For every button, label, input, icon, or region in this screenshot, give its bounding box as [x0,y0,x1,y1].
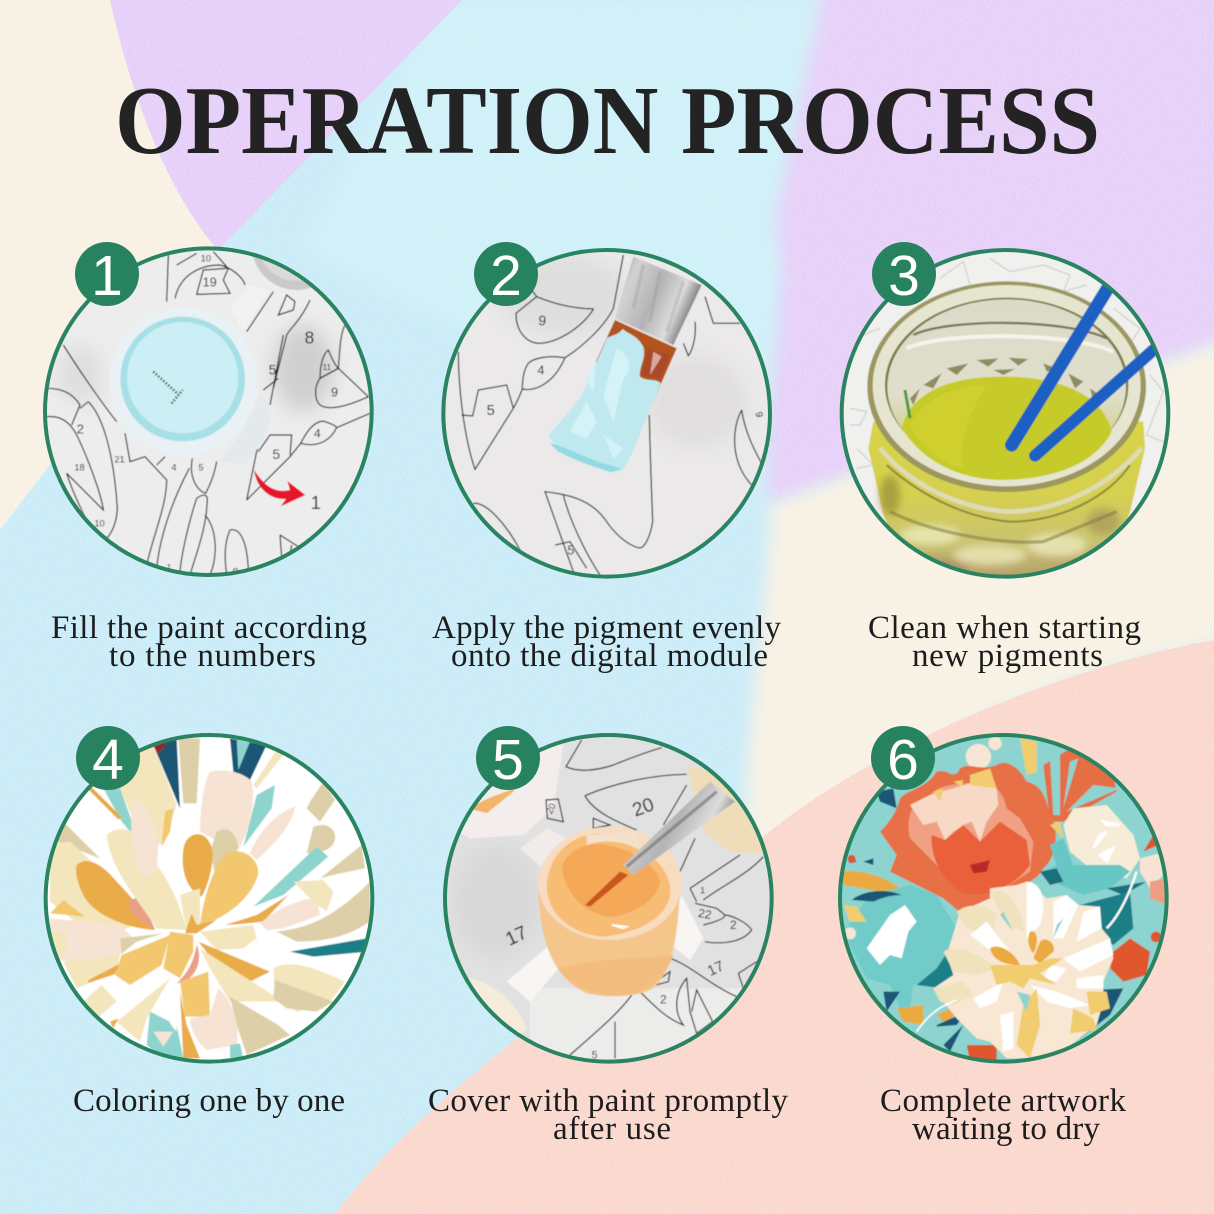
photo: paint cup on numbered canvas [43,246,374,577]
red-orange flower [880,763,1056,915]
caption: step 3: new pigments [912,638,1103,674]
photo: paint cup on numbered canvas: 4 [171,463,177,473]
caption: step 5: after use [553,1111,671,1147]
badge: number 2: 2 [490,244,522,308]
photo: paint cup on numbered canvas: 5 [269,361,277,377]
badge: number 6 [871,726,935,792]
photo: orange paint cup with brush: 22 [697,906,713,922]
caption: step 6 [880,1083,1126,1147]
caption: step 2: Apply the pigment evenly [432,610,782,646]
photo: paint cup on numbered canvas: 18 [74,463,85,473]
title: OPERATION PROCESS [115,67,1100,174]
panel: step 6 [830,725,1180,1147]
caption: step 3 [868,610,1141,674]
photo: orange paint cup with brush: 20 [544,802,558,815]
photo: orange paint cup with brush: 20 [630,794,657,822]
photo: brush applying blue paint [441,248,772,579]
caption: step 3: Clean when starting [868,610,1141,646]
caption: step 2 [432,610,782,674]
photo: paint cup on numbered canvas: 19 [203,276,217,290]
photo: brush applying blue paint: 4 [537,363,544,377]
badge: number 6: 6 [887,728,919,792]
photo: orange paint cup with brush: 2 [730,918,737,932]
panel: step 3 [830,235,1180,674]
caption: step 5: Cover with paint promptly [428,1083,788,1119]
photo: paint cup on numbered canvas: 4 [314,426,321,440]
photo: paint cup on numbered canvas: 11 [322,362,332,372]
badge: number 1 [75,242,139,308]
photo: brush applying blue paint: 9 [538,312,547,329]
photo: jar of cleaning water with brushes [840,248,1170,579]
photo: brush applying blue paint: 9 [753,411,764,419]
photo: paint cup on numbered canvas: 10 [201,254,211,264]
caption: step 2: onto the digital module [451,638,768,674]
pale top-right flower [1063,805,1140,878]
photo: paint cup on numbered canvas: 2 [77,421,84,436]
caption: step 1: Fill the paint according [51,610,367,646]
caption: step 5 [428,1083,788,1147]
photo: paint cup on numbered canvas: 5 [272,446,280,462]
badge: number 4: 4 [92,728,124,792]
panel: step 4 [30,725,390,1119]
icon: red arrow [254,470,305,506]
badge: number 5: 5 [492,728,524,792]
photo: paint cup on numbered canvas: 8 [305,327,314,347]
right dark and orange [1080,892,1133,945]
photo: orange paint cup with brush: 5 [592,1049,598,1061]
badge: number 4 [76,726,140,792]
white chrysanthemum [933,882,1113,1058]
photo: paint cup on numbered canvas: 9 [233,567,239,579]
photo: paint cup on numbered canvas: 1 [311,492,321,513]
caption: step 6: Complete artwork [880,1083,1126,1119]
photo: orange paint cup with brush: 17 [705,958,727,980]
photo: paint cup on numbered canvas: 9 [331,386,338,400]
badge: number 2 [474,242,538,308]
photo: brush applying blue paint: 5 [487,403,495,419]
badge: number 3 [872,242,936,308]
caption: step 1 [51,610,367,674]
photo: orange paint cup with brush [443,733,774,1064]
photo: brush applying blue paint: 5 [567,543,574,557]
badge: number 3: 3 [888,244,920,308]
panel: step 2 [430,235,782,674]
panel: step 1 [43,242,374,666]
caption: step 6: waiting to dry [912,1111,1100,1147]
illustration: completed floral artwork [838,733,1169,1064]
badge: number 1: 1 [91,244,123,308]
illustration: close-up petals [44,733,374,1064]
photo: paint cup on numbered canvas: 5 [198,463,204,473]
photo: orange paint cup with brush: 1 [700,885,705,895]
caption: step 4: Coloring one by one [73,1083,345,1119]
photo: paint cup on numbered canvas: 1 [167,562,172,572]
caption: step 1: to the numbers [109,638,316,674]
panel: step 5 [428,725,788,1147]
photo: paint cup on numbered canvas: 21 [114,454,125,464]
photo: paint cup on numbered canvas: 10 [94,519,105,529]
teal left flower [843,885,957,1008]
badge: number 5 [476,726,540,792]
photo: orange paint cup with brush: 17 [503,922,531,951]
photo: orange paint cup with brush: 2 [660,992,667,1006]
